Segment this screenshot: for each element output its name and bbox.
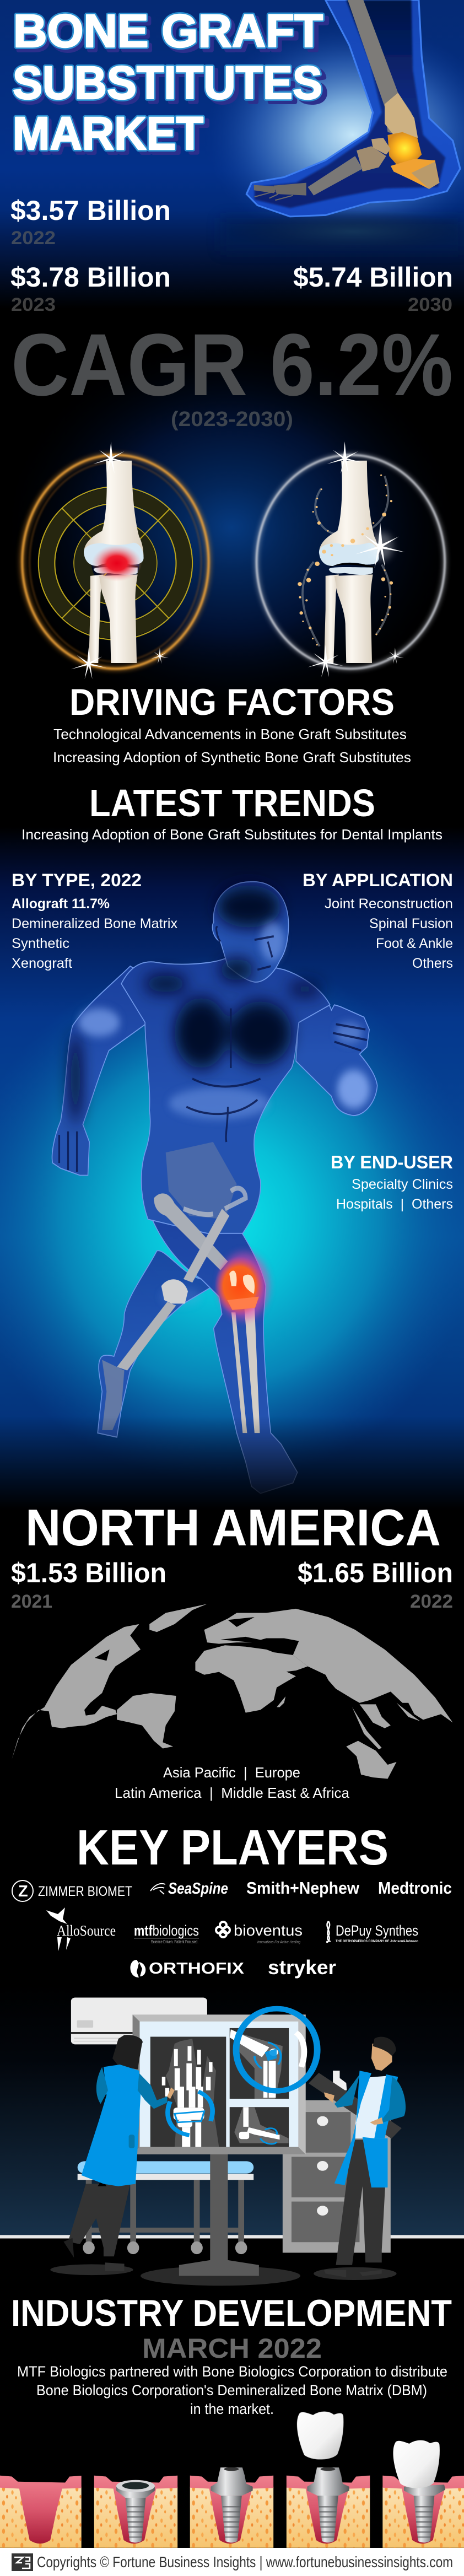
- text: driving factor one: Technological Advancements in Bone Graft Substitutes: [53, 726, 407, 742]
- panel: hero background: [0, 0, 464, 309]
- stat: north america 2021: [11, 1558, 166, 1612]
- background: radial blue glow behind knees: [0, 335, 463, 720]
- drawers: [283, 2071, 391, 2252]
- shadows: [50, 2264, 397, 2286]
- stat: 2030 market size: $5.74 Billion: [293, 262, 453, 293]
- heading: north america: NORTH AMERICA: [25, 1499, 441, 1556]
- stat: 2022 market size: [10, 195, 171, 249]
- text: other regions: Asia Pacific | Europe: [163, 1764, 300, 1781]
- logo: MTF Biologics: mtfbiologics: [134, 1922, 199, 1939]
- facial and muscle lines: [59, 927, 367, 1172]
- panel: doctors background: [0, 1984, 464, 2237]
- stat: 2023 market size: $3.78 Billion: [10, 262, 171, 293]
- title line 3: MARKET: [13, 107, 203, 159]
- map: world globe: [12, 1604, 453, 1779]
- logo: Stryker: stryker: [268, 1956, 336, 1979]
- stat: 2023 market size: 2023: [11, 294, 56, 315]
- heading: driving factors: DRIVING FACTORS: [69, 681, 395, 723]
- logo: MTF Biologics: [134, 1922, 199, 1944]
- glow: inflamed knee: [214, 1253, 269, 1319]
- text block: by application: BY APPLICATION: [303, 870, 453, 890]
- stat: north america 2022: 2022: [410, 1591, 453, 1612]
- skeleton: pelvis and leg bones: [102, 1142, 260, 1433]
- text block: by application: Spinal Fusion: [369, 916, 453, 931]
- text: development description: in the market.: [190, 2401, 274, 2417]
- text block: by application: Others: [412, 956, 453, 971]
- text: other regions: [115, 1764, 350, 1801]
- magnifying glass: [236, 2009, 397, 2133]
- text block: by application: Joint Reconstruction: [325, 896, 453, 912]
- text block: by type: Demineralized Bone Matrix: [12, 916, 177, 931]
- stat: north america 2022: $1.65 Billion: [298, 1558, 453, 1588]
- text block: by type: Allograft 11.7%: [12, 896, 110, 912]
- text block: by end-user: Hospitals | Others: [336, 1197, 453, 1212]
- logo: Orthofix: ORTHOFIX: [149, 1960, 245, 1977]
- illustration: damaged knee joint: [22, 441, 209, 679]
- title line 1: BONE GRAFT: [13, 5, 323, 57]
- text block: by type: [12, 870, 177, 971]
- title line 3: MARKET: [13, 107, 203, 159]
- logo: Bioventus: Innovations For Active Healing: [257, 1941, 300, 1944]
- illustration: foot and ankle x-ray: [246, 0, 460, 217]
- text block: by type: Xenograft: [12, 956, 72, 971]
- feet: [105, 2262, 382, 2277]
- illustration: running man with glowing knee: [52, 882, 377, 1494]
- title line 2: SUBSTITUTES: [13, 57, 322, 109]
- logo: AlloSource: AlloSource: [57, 1922, 116, 1939]
- logo: Bioventus: bioventus: [234, 1922, 303, 1939]
- cagr: (2023-2030): [171, 408, 293, 431]
- stat: 2023 market size: [10, 262, 171, 315]
- stat: north america 2022: [298, 1558, 453, 1612]
- title line 2: SUBSTITUTES: [13, 57, 322, 109]
- white bone glare: [296, 2033, 304, 2067]
- illustration: dental implant stages: [0, 2412, 464, 2548]
- air conditioner: [71, 1998, 207, 2044]
- floor line: [0, 2235, 464, 2239]
- stage two: implant: [94, 2476, 177, 2548]
- fade: figure fading to black: [0, 1416, 464, 1510]
- text: date: MARCH 2022: [142, 2333, 322, 2364]
- stage three: abutment: [190, 2467, 273, 2548]
- heading: latest trends: LATEST TRENDS: [89, 782, 375, 824]
- heading: key players: KEY PLAYERS: [77, 1820, 389, 1876]
- illustration: doctors examining x-rays: [0, 1998, 464, 2288]
- title line 1: BONE GRAFT: [13, 5, 323, 57]
- highlights: lit muscles: [78, 922, 370, 1306]
- logo: MTF Biologics: Science Driven. Patient Focused.: [151, 1939, 198, 1944]
- title: Bone Graft Substitutes Market: [13, 5, 327, 163]
- stat: 2030 market size: [293, 262, 453, 315]
- icon: fortune business insights logo: [12, 2553, 33, 2571]
- foot x-ray: [234, 2107, 289, 2144]
- text block: by type: BY TYPE, 2022: [12, 870, 142, 890]
- title line 1: BONE GRAFT: [15, 8, 327, 60]
- logo: SeaSpine: [150, 1880, 228, 1898]
- footer: [0, 2548, 464, 2576]
- stage five: completed implant: [382, 2440, 464, 2548]
- x-ray light board: [133, 2014, 306, 2154]
- text: development description: [17, 2363, 447, 2417]
- left doctor: [63, 2035, 175, 2257]
- text block: by type: Synthetic: [12, 936, 69, 951]
- text: other regions: Latin America | Middle East & Africa: [115, 1785, 350, 1801]
- knee x-ray: [230, 2029, 283, 2099]
- stage one: empty socket: [0, 2476, 83, 2548]
- logo: AlloSource: [46, 1907, 116, 1951]
- logo: DePuy Synthes: DePuy Synthes: [336, 1922, 418, 1939]
- title line 2: SUBSTITUTES: [15, 60, 327, 112]
- text: development description: MTF Biologics partnered with Bone Biologics Corporation to distribute: [17, 2363, 447, 2380]
- hand x-ray: [162, 2039, 219, 2147]
- logo: Zimmer Biomet: Z: [18, 1883, 28, 1900]
- logo: DePuy Synthes: THE ORTHOPAEDICS COMPANY OF Johnson&Johnson: [336, 1940, 418, 1943]
- stat: 2022 market size: $3.57 Billion: [10, 195, 171, 226]
- stage four: crown above abutment: [287, 2412, 370, 2548]
- text block: by end-user: [331, 1152, 453, 1212]
- illustration: healed knee joint: [257, 441, 445, 677]
- shading: dark muscle shadows: [69, 885, 322, 1124]
- stat: 2022 market size: 2022: [11, 228, 56, 249]
- logo: Zimmer Biomet: ZIMMER BIOMET: [38, 1884, 132, 1899]
- logo: Bioventus: [216, 1922, 303, 1944]
- text: driving factor two: Increasing Adoption of Synthetic Bone Graft Substitutes: [53, 749, 411, 766]
- text block: by application: Foot & Ankle: [376, 936, 453, 951]
- stat: north america 2021: 2021: [11, 1591, 52, 1612]
- stat: north america 2021: $1.53 Billion: [11, 1558, 166, 1588]
- logo: Medtronic: Medtronic: [378, 1878, 452, 1898]
- text block: by end-user: Specialty Clinics: [352, 1177, 453, 1192]
- stand: [179, 2154, 259, 2276]
- stat: 2030 market size: 2030: [408, 294, 452, 315]
- text block: by end-user: BY END-USER: [331, 1152, 453, 1172]
- text block: by application: [303, 870, 453, 971]
- logo: Smith+Nephew: Smith+Nephew: [246, 1878, 360, 1898]
- title line 3: MARKET: [15, 111, 208, 163]
- text: latest trend: Increasing Adoption of Bone Graft Substitutes for Dental Implants: [21, 826, 443, 843]
- logo: SeaSpine: SeaSpine: [168, 1880, 228, 1898]
- panel: running figure background: [0, 827, 464, 1510]
- text: development description: Bone Biologics Corporation's Demineralized Bone Matrix (DBM): [36, 2382, 427, 2399]
- right doctor: [324, 2037, 406, 2265]
- examination bed: [78, 2161, 253, 2254]
- logo: Zimmer Biomet: [12, 1880, 132, 1901]
- logo: DePuy Synthes: [327, 1921, 418, 1943]
